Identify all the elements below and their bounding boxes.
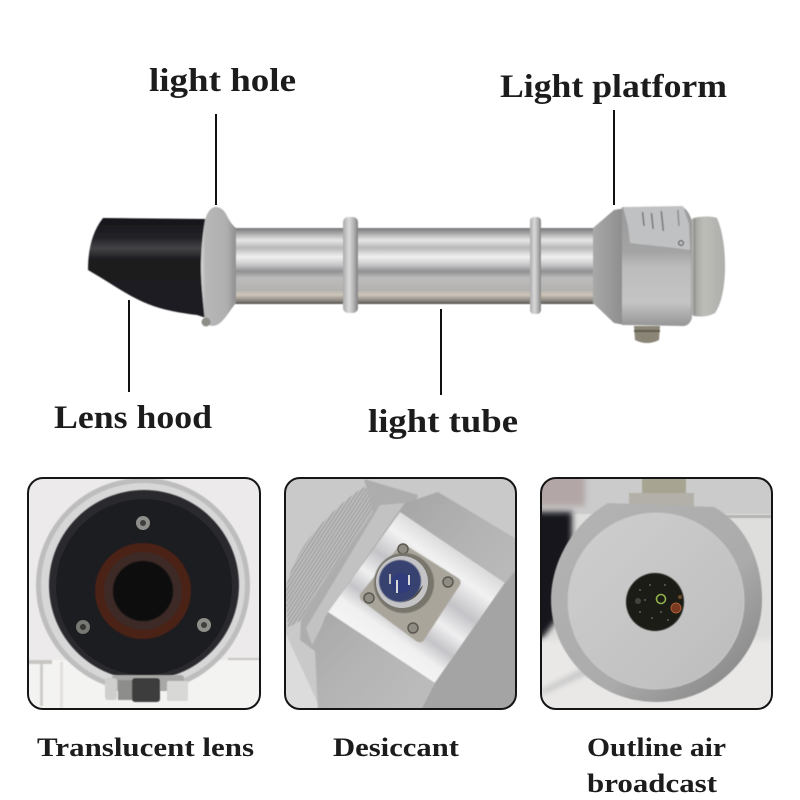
background bracket (28, 658, 260, 708)
panel: outline air broadcast (535, 472, 780, 715)
caption: Outline air broadcast: broadcast (587, 769, 717, 798)
platform cone (593, 208, 625, 325)
light hole flange (201, 207, 236, 326)
aluminium body (315, 492, 518, 712)
leader line: lens hood (128, 300, 130, 392)
connector screws (364, 544, 453, 633)
caption: Outline air broadcast: Outline air (587, 733, 726, 762)
aperture speckles (635, 584, 669, 621)
tube ring left (343, 217, 358, 313)
round connector (374, 553, 434, 613)
knurled cap (286, 487, 373, 628)
bottom clamp (105, 675, 188, 702)
tube ring right (530, 217, 541, 314)
caption: Desiccant: Desiccant (333, 733, 459, 762)
outer body (551, 503, 762, 702)
screws (76, 516, 211, 634)
aperture (626, 573, 684, 631)
flange bolt (202, 318, 210, 326)
lower right cylinder (422, 572, 515, 708)
caption: Translucent lens: Translucent lens (37, 733, 254, 762)
side connector (634, 326, 660, 343)
leader line: light platform (613, 110, 615, 205)
label: light hole: light hole (149, 63, 296, 99)
caption: Outline air broadcast (587, 733, 726, 798)
lens hood (88, 218, 206, 318)
panel: translucent lens (27, 477, 261, 710)
green ring (656, 594, 666, 604)
leader line: light hole (215, 114, 217, 205)
leader line: light tube (440, 309, 442, 395)
main device: light tube assembly (88, 206, 725, 343)
panel: desiccant (284, 477, 518, 712)
product label sticker (623, 206, 690, 250)
black lens face (49, 490, 239, 680)
label: light tube: light tube (368, 404, 518, 440)
platform cap (693, 216, 725, 317)
orange seal ring (95, 543, 191, 639)
silver outer ring (36, 478, 250, 692)
blurred background (542, 479, 771, 514)
lens hole (113, 561, 173, 621)
top connector (629, 478, 694, 507)
light tube body (228, 228, 594, 304)
platform body (622, 207, 692, 326)
connector plate (360, 544, 461, 642)
label: Light platform: Light platform (500, 69, 727, 105)
label: Lens hood: Lens hood (54, 400, 212, 436)
inner disc (568, 513, 744, 689)
red dot (671, 603, 681, 613)
machined flat (328, 512, 505, 683)
smooth collar (300, 479, 418, 652)
